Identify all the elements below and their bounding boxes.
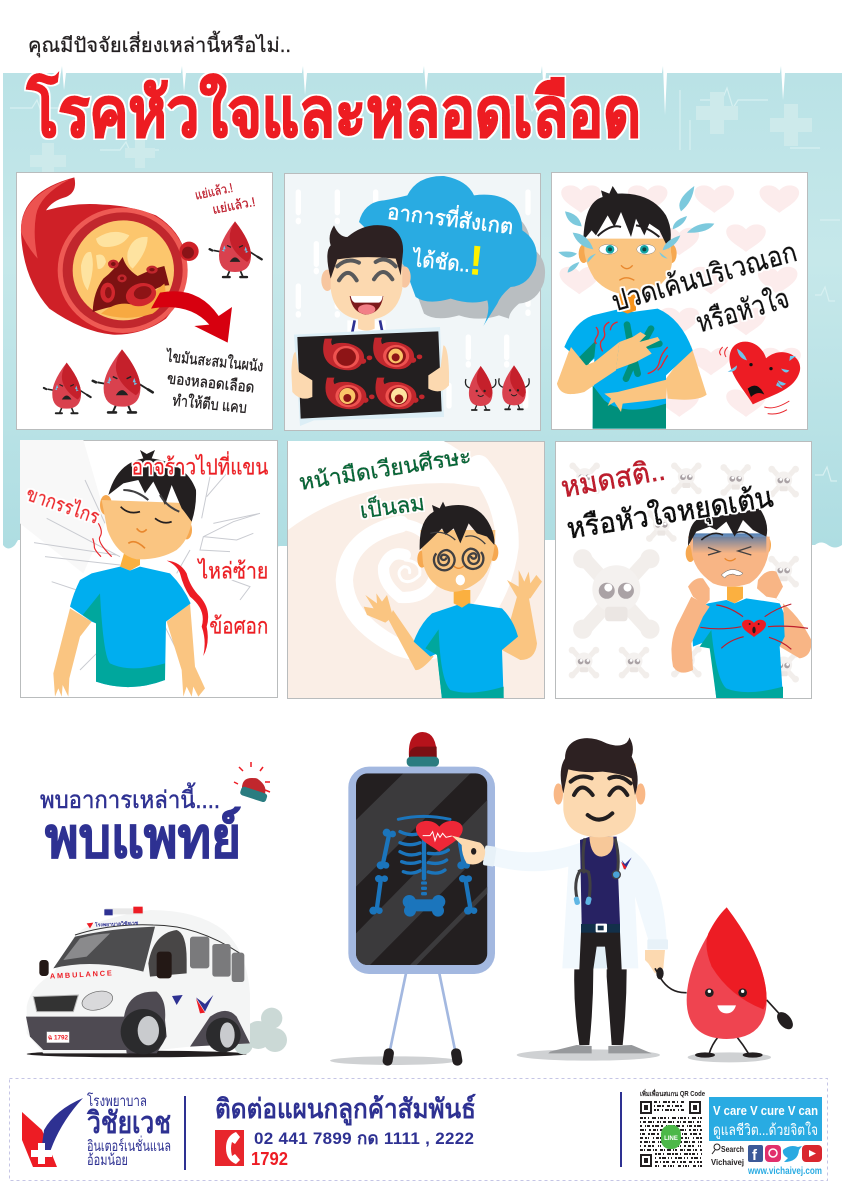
panel: doctor with x-rays: [284, 174, 545, 430]
bumper: [26, 1017, 135, 1050]
dizzy text: เป็นลม: [358, 488, 426, 523]
fainting text: หมดสติ..: [559, 454, 668, 504]
symptom labels: ไหล่ซ้าย: [197, 557, 268, 583]
wheels: [121, 992, 250, 1054]
title: โรคหัวใจและหลอดเลือด: [26, 73, 641, 151]
dizzy text: [297, 443, 473, 523]
x-ray stand, doctor and blood drop: [330, 732, 796, 1066]
QR code: เพิ่มเพื่อนสแกน QR Code: [640, 1088, 705, 1098]
caption: [164, 347, 264, 417]
panel: chest pain: [552, 172, 808, 430]
doctor character: [321, 225, 411, 335]
caption: ทำให้ตีบ แคบ: [172, 391, 248, 417]
roof lights: [104, 907, 143, 915]
caption: ไขมันสะสมในผนัง: [164, 347, 264, 375]
hospital logo decals: โรงพยาบาลวิชัยเวช: [94, 919, 139, 929]
see a doctor heading: [40, 782, 241, 869]
headlight: [80, 988, 115, 1013]
windshield: [53, 927, 155, 972]
pain text: หรือหัวใจ: [692, 281, 793, 338]
exhaust smoke: [234, 1008, 287, 1054]
license plate: ฉ 1792: [48, 1035, 69, 1042]
exclamation text: [194, 181, 256, 217]
windows: [148, 930, 244, 982]
top question heading: คุณมีปัจจัยเสี่ยงเหล่านี้หรือไม่..: [28, 31, 291, 58]
panel: fainting: [556, 442, 812, 698]
slogan box: [709, 1097, 822, 1141]
panel: dizziness: [288, 441, 544, 699]
exclamation text: แย่แล้ว.!: [211, 195, 256, 217]
slogan box: ดูแลชีวิต...ด้วยจิตใจ: [713, 1121, 818, 1139]
symptom labels: อาจร้าวไปที่แขน: [132, 450, 268, 479]
search label: Vichaivej: [711, 1158, 744, 1167]
icon: telephone: [215, 1130, 244, 1166]
icon: small siren: [234, 762, 270, 803]
artery cross-section: [21, 177, 199, 335]
search label: Search: [721, 1145, 744, 1154]
hospital logo: อินเตอร์เนชั่นแนล: [87, 1135, 171, 1155]
fainting text: หรือหัวใจหยุดเต้น: [565, 480, 776, 547]
hospital logo: [22, 1092, 171, 1169]
stand legs: [382, 973, 463, 1066]
blood drop mascot: [655, 907, 796, 1058]
ambulance label: AMBULANCE: [50, 968, 112, 981]
skull pattern: [569, 462, 799, 683]
footer contact box: [10, 1078, 828, 1180]
doctor character: [452, 737, 668, 1053]
hospital logo: โรงพยาบาล: [87, 1092, 147, 1110]
siren: [407, 732, 439, 767]
faint hearts pattern: [560, 185, 801, 417]
ambulance: [26, 907, 287, 1057]
hospital logo: วิชัยเวช: [86, 1107, 171, 1140]
symptom labels: [23, 450, 268, 638]
speech bubble: [359, 176, 545, 326]
skeleton: [369, 816, 477, 917]
arrow: [151, 291, 232, 343]
see a doctor heading: พบแพทย์: [45, 806, 241, 869]
symptom labels: ข้อศอก: [209, 612, 268, 638]
phone numbers: 02 441 7899 กด 1111 , 2222: [254, 1129, 474, 1148]
license plate: [47, 1032, 69, 1043]
symptom labels: ขากรรไกร: [23, 482, 102, 529]
slogan box: V care V cure V can: [713, 1103, 818, 1118]
x-ray sheet: [291, 327, 449, 426]
pain text: [608, 236, 800, 338]
worried blood drops: [44, 221, 262, 413]
see a doctor heading: พบอาการเหล่านี้....: [40, 782, 220, 814]
grille: [33, 995, 78, 1012]
van body: [27, 910, 250, 1053]
teal ice background band: [3, 66, 842, 548]
exclamation text: แย่แล้ว.!: [194, 181, 234, 203]
phone numbers: 1792: [251, 1149, 288, 1169]
two blood drops: [465, 365, 529, 410]
search label: [711, 1144, 744, 1167]
chest pain character: [557, 186, 714, 429]
panel: referred pain: [20, 440, 278, 698]
x-ray screen: [356, 757, 487, 965]
hospital logo: อ้อมน้อย: [87, 1152, 128, 1169]
crying heart: [718, 338, 804, 414]
dizzy character: [364, 502, 542, 699]
red pain lines: [93, 523, 208, 656]
heart with pulse: [416, 821, 463, 852]
spiral background: [288, 441, 544, 657]
contact heading: ติดต่อแผนกลูกค้าสัมพันธ์: [215, 1093, 476, 1126]
fainting character: [671, 508, 811, 698]
website: www.vichaivej.com: [747, 1166, 822, 1177]
mirrors: [39, 952, 172, 978]
panel: plaque in artery: [16, 172, 272, 430]
caption: ของหลอดเลือด: [166, 369, 255, 396]
social icons: [748, 1145, 822, 1164]
QR code: LINE: [664, 1136, 678, 1142]
shadows: [330, 1049, 771, 1065]
speech bubble: ได้ชัด..: [410, 246, 471, 277]
pain text: ปวดเค้นบริเวณอก: [608, 236, 800, 317]
hospital logo decals: [87, 919, 213, 1013]
phone numbers: [251, 1129, 474, 1169]
ground shadow: [27, 1051, 247, 1057]
speech bubble: !: [467, 236, 485, 284]
social icons: f: [752, 1147, 758, 1164]
fainting text: [559, 454, 776, 547]
QR code: [640, 1088, 705, 1166]
dizzy text: หน้ามืดเวียนศีรษะ: [297, 443, 473, 495]
x-ray board: [348, 767, 495, 974]
character with referred pain: [53, 450, 205, 697]
speech bubble: อาการที่สังเกต: [386, 197, 515, 239]
